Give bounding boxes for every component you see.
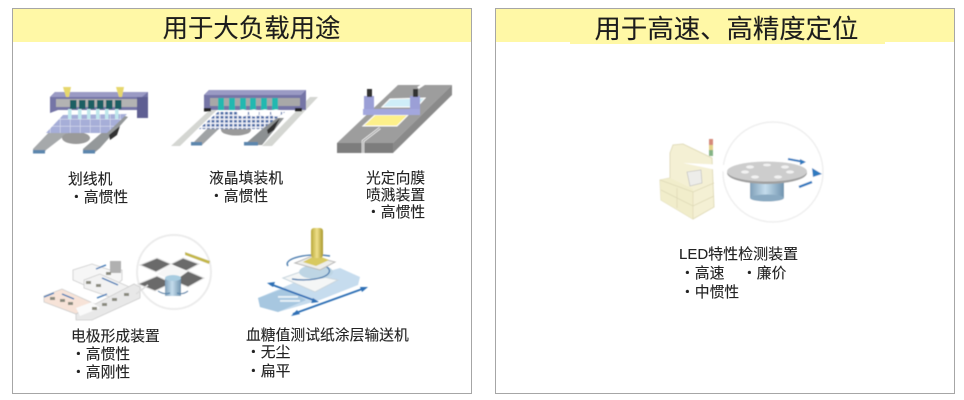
icon: scribing machine — [33, 87, 148, 154]
label: LED inspection machine: ・高速 — [680, 265, 725, 282]
panel: high-speed high-precision positioning — [496, 8, 954, 394]
label: alignment film sputter: 光定向膜 — [366, 170, 425, 187]
panel: heavy-load applications — [12, 8, 472, 394]
heading band — [496, 9, 954, 44]
heading: 用于大负载用途 — [163, 15, 340, 43]
label: LED inspection machine: ・廉价 — [742, 265, 787, 282]
label: scribing machine: ・高惯性 — [69, 189, 128, 206]
label: alignment film sputter: ・高惯性 — [366, 204, 425, 221]
label: alignment film sputter — [366, 170, 425, 221]
icon: alignment film sputter — [337, 84, 452, 153]
icon: electrode forming equipment — [44, 235, 211, 320]
label: LED inspection machine — [679, 246, 798, 301]
label: test strip coating conveyor: 血糖值测试纸涂层输送机 — [246, 327, 409, 344]
icon: test strip coating conveyor — [258, 228, 368, 316]
label: liquid crystal dispenser: 液晶填装机 — [209, 170, 283, 187]
label: liquid crystal dispenser — [209, 170, 283, 205]
heading: 用于高速、高精度定位 — [595, 14, 858, 44]
label: test strip coating conveyor: ・扁平 — [246, 363, 291, 380]
label: scribing machine — [68, 171, 128, 206]
heading band — [13, 9, 471, 42]
icon: liquid crystal dispenser — [171, 90, 318, 146]
label: test strip coating conveyor: ・无尘 — [246, 344, 291, 361]
label: liquid crystal dispenser: ・高惯性 — [209, 188, 268, 205]
label: scribing machine: 划线机 — [68, 171, 113, 188]
icon: LED inspection machine with turntable — [660, 122, 823, 222]
label: test strip coating conveyor — [246, 327, 409, 380]
label: LED inspection machine: LED特性检测装置 — [679, 246, 798, 263]
label: alignment film sputter: 喷溅装置 — [366, 187, 425, 204]
label: electrode forming equipment: ・高惯性 — [71, 346, 130, 363]
label: electrode forming equipment: ・高刚性 — [71, 364, 130, 381]
label: electrode forming equipment — [71, 328, 160, 381]
label: LED inspection machine: ・中惯性 — [680, 284, 739, 301]
label: electrode forming equipment: 电极形成装置 — [71, 328, 160, 345]
